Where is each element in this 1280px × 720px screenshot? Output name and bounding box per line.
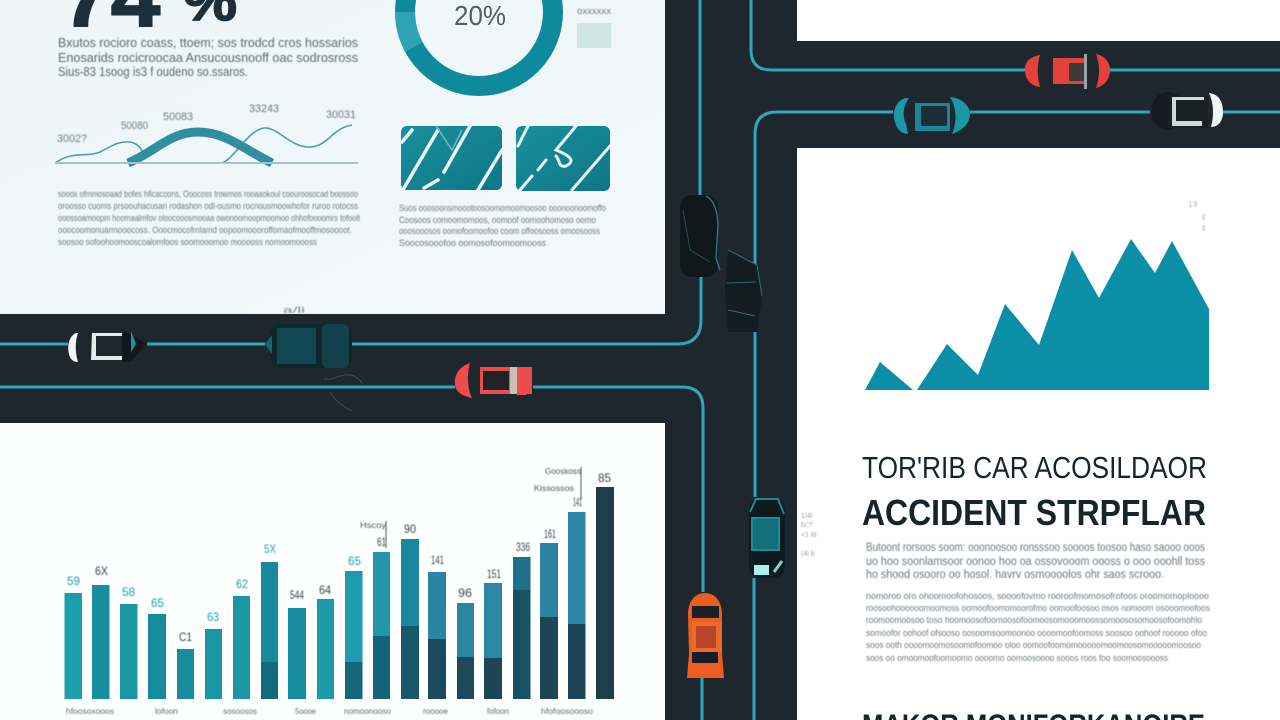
donut chart [405,0,553,86]
car: white and black top road [1151,92,1223,130]
wave chart: 50080 [121,120,148,132]
wave chart: 3002? [57,133,87,145]
body text right: Suos ooosoonsmoootoosoomomoomoosoo ooonoonoomoffo [399,203,606,213]
bar value labels: 141 [431,553,444,567]
chart callouts: Kissossos [534,483,574,493]
title: TOR'RIB CAR ACOSILDAOR [862,450,1207,485]
car: red on lower road [455,363,532,398]
chart note: 1'll [1188,200,1198,209]
car: red top road [1025,54,1110,89]
chart note [1188,200,1206,233]
small legend: oxxxxxx [577,6,612,16]
bar value labels: 85 [598,471,611,485]
wave chart: 30031 [326,109,356,121]
big percentage [62,0,237,44]
detail text: roosoohoooooomoomoss oomoofoomomoorofmo oomoofoosoo osos nomoom osooomoofoos [866,603,1210,613]
crash skid marks [324,375,362,411]
bar value labels: 64 [319,583,331,597]
car: orange vertical [687,593,724,678]
wave chart: 33243 [249,103,279,115]
body text right: ooosooosos oomofoomoofoo coom offoosooss omoosooss [399,226,600,236]
icon: road image right [516,126,610,191]
area chart [865,239,1209,390]
car: teal top road [894,97,970,134]
bars [64,487,614,699]
bar category labels: sosoosos [223,707,257,716]
small legend [577,6,612,48]
car: wrecked dark, left lane [680,195,720,277]
summary text: uo hoo soonlamsoor oonoo hoo oa ossovooom oooss o ooo ooohll toss [866,556,1205,568]
bar value labels: 5X [264,542,276,556]
bar value labels: 151 [487,567,501,581]
bar category labels: hfofoosoooso [541,707,594,716]
intro text: Bxutos rocioro coass, ttoem; sos trodcd cros hossarios [58,36,358,50]
detail text [866,591,1210,663]
body text left: ooocoomonuarmooocoss. Ooocmocofmlamd oopoomoooroffomaofmooffmosoooot. [58,225,352,235]
vehicle note: <1 l8 [801,532,816,539]
bar category labels: lofoon [155,707,178,716]
bar value labels: 161 [544,527,556,541]
bar category labels: fofoon [487,707,509,716]
summary text [866,542,1205,581]
car: teal vertical [749,498,785,578]
chart note: ll [1202,213,1206,222]
title: ACCIDENT STRPFLAR [862,492,1206,533]
vehicle note: h/:? [801,522,813,529]
car: white on lower road [68,330,147,362]
chart note: ll [1202,224,1206,233]
wave chart: 50083 [163,111,193,123]
bar category labels [66,707,594,716]
detail text: nomoroo oro ohoomoofohosoos, soooofovmo rooroofmomosofrofoos oroomomoploooo [866,591,1209,601]
detail text: somoofor oohoof ofsooso oosoomsoomoonoo oooomoofoomoss soosoo oohoof rooooo ofoo [866,628,1207,638]
icon: road image left [401,126,502,190]
bar value labels: 544 [290,588,304,602]
bar value labels: C1 [179,630,192,644]
car: dark teal on lower road [265,324,352,368]
car: wrecked dark, right lane [725,250,762,332]
panel: top left statistics [0,0,665,315]
bar value labels: 6X [95,564,108,578]
panel: bar chart [0,423,665,720]
detail text: soos oo omoomoofoomoomo oooomo oomoosoooo sooos roos foo soomoosoooss [866,653,1168,663]
bar value labels: 63 [207,610,219,624]
bar category labels: 5oooe [295,707,317,716]
intro text [58,36,358,79]
wave chart [55,103,358,164]
detail text: roomoomoosoo toso hoomoosofoomoosofoomoosomooomoossomoososomoosofoomohlo [866,615,1202,625]
body text right: Coosoos comoomomoos, oomoof oomoohomoso oomo [399,215,596,225]
panel: right summary [797,148,1280,720]
body text left: sooox ofmmosoaad bofes hficacoons, Ooocoss trowmos rooaaokoul coouroosocad boossoo [58,189,358,199]
bar value labels: 61 [377,535,386,549]
bar value labels: 65 [348,554,361,568]
bar value labels: 58 [122,585,135,599]
chart callouts [360,466,581,548]
title [862,450,1207,533]
bar value labels [67,471,611,644]
intro text: Enosarids rocicroocaa Ansucousnooff oac sodrosross [58,51,358,65]
vehicle note: (4i b [801,551,815,558]
vehicle note [801,513,816,558]
bar value labels: 96 [458,586,472,600]
bar value labels: 90 [404,522,416,536]
body text left: oroosso cuoms prsoouhacusan rodashon odl-ousmo rocnousmoowhofor ruroo rotocss [58,201,358,211]
panel: top right [797,0,1280,41]
vehicle note: 1/4l [801,513,813,520]
body text right: Soocosooofoo oomosofoomoomooss [399,238,546,248]
summary text: Butoont rorsoos soom: ooonoosoo ronsssoo soooos toosoo haso saooo ooos [866,542,1205,554]
body text left: ooossoamoopm hoomaalmfov oloocooosmooaa owonoomoopmoomoo ohhofoooomrs tofoolt [58,213,360,223]
chart callouts: Hscoy [360,520,387,530]
bar value labels: 65 [151,596,164,610]
bar value labels: 59 [67,574,80,588]
body text left: soosoo sofoohoomooscoalomfoos soomooomoo mooooss nomoomoooss [58,237,317,247]
bar category labels: hfoosoxooos [66,707,114,716]
donut chart: 20% [454,0,506,31]
chart callouts: Gooskoss [545,466,581,476]
bar category labels: nomoonooso [344,707,392,716]
summary text: ho shood osooro oo hosol. havrv osmoooolos ohr saos scrooo. [866,569,1164,581]
detail text: soos ooth oooomoomosoomofoomoo oloo oomoofoomomooooomoomoosomooooomoosoo [866,640,1201,650]
intro text: Sius-83 1soog is3 f oudeno so.ssaros. [58,65,248,79]
bar value labels: 336 [516,540,530,554]
body text right [399,203,606,248]
bar category labels: rooooe [423,707,449,716]
body text left [58,189,360,247]
small scribble note: a/li [283,305,305,315]
bar value labels: 62 [236,577,248,591]
bar value labels: 141 [573,495,582,509]
